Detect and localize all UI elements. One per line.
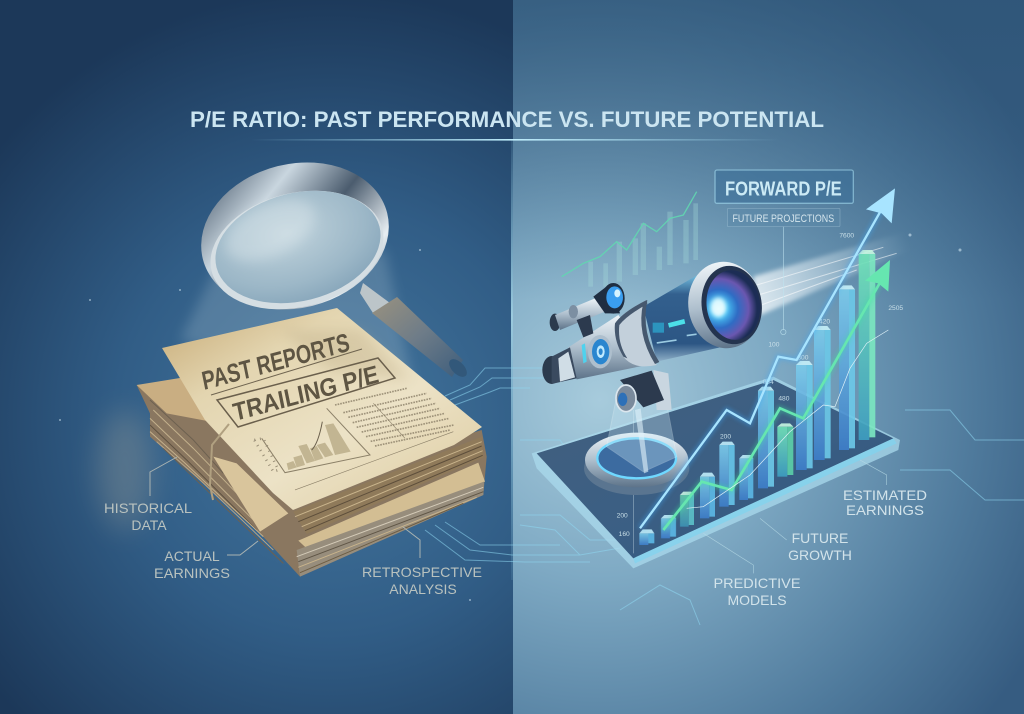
mount fork <box>616 370 672 412</box>
light cone <box>180 250 420 420</box>
bar value labels: 200 <box>617 512 628 519</box>
collar <box>615 300 657 366</box>
accent stripes <box>582 333 639 363</box>
label: actual earnings <box>154 541 258 581</box>
eyepiece <box>542 347 577 384</box>
label: estimated earnings: ESTIMATED <box>843 487 927 503</box>
background sparkles <box>59 234 962 601</box>
bar value labels: 004 <box>763 379 774 386</box>
rear body <box>568 315 655 379</box>
finder scope <box>550 283 625 337</box>
label: actual earnings: EARNINGS <box>154 565 230 581</box>
tablet platform <box>532 377 900 568</box>
left page edges <box>150 400 283 563</box>
green growth arrow <box>663 260 890 530</box>
label: actual earnings: ACTUAL <box>164 548 220 564</box>
label: retrospective analysis: ANALYSIS <box>389 581 457 597</box>
label: historical data: HISTORICAL <box>104 500 192 516</box>
telescope stand <box>584 387 689 495</box>
loose sheets left <box>137 377 220 423</box>
panel: past performance background <box>0 0 513 714</box>
label: historical data <box>104 457 192 533</box>
vertical pointer line <box>781 227 786 335</box>
tube readouts <box>653 319 697 344</box>
bar value labels: 7600 <box>839 232 854 239</box>
stack body <box>137 377 487 577</box>
title: P/E RATIO: PAST PERFORMANCE VS. FUTURE POTENTIAL <box>190 107 824 132</box>
group: forecast chart (zoom coordinates) <box>617 170 903 573</box>
label: future growth: GROWTH <box>788 547 852 563</box>
bar value labels <box>617 232 903 538</box>
light beam <box>753 232 910 317</box>
future projections badge <box>727 208 840 227</box>
lens rim <box>185 143 405 329</box>
label: predictive models <box>714 575 800 608</box>
panel: future potential background <box>513 0 1024 714</box>
group: magnifying glass over past reports <box>180 143 470 420</box>
dust cloud <box>97 410 153 530</box>
trailing p/e box: TRAILING P/E <box>231 360 381 427</box>
main tube <box>643 272 723 362</box>
bar value labels: 420 <box>819 318 830 325</box>
right layers <box>293 437 483 534</box>
future projections badge: FUTURE PROJECTIONS <box>732 213 834 225</box>
front ring <box>683 257 767 353</box>
label: predictive models: PREDICTIVE <box>714 575 800 591</box>
center divider <box>511 140 513 580</box>
lens glass <box>198 173 396 327</box>
telescope <box>542 257 767 412</box>
background mini line chart <box>562 192 698 287</box>
bar chart <box>639 250 875 545</box>
mini data table <box>335 388 454 446</box>
magnifier shadow on sheet <box>280 330 410 380</box>
handle <box>360 283 470 380</box>
top sheet <box>162 308 482 510</box>
circuit lines <box>425 368 1024 625</box>
callout leaders <box>703 460 887 573</box>
blue growth arrow <box>640 188 895 528</box>
report heading: past reports: PAST REPORTS <box>199 327 352 396</box>
forward p/e badge: FORWARD P/E <box>725 177 842 200</box>
mini bar chart <box>254 388 454 490</box>
label: estimated earnings: EARNINGS <box>846 502 924 518</box>
group: future chart base (zoom coordinates) <box>532 192 910 568</box>
bar value labels: 100 <box>768 342 780 349</box>
string <box>210 424 229 500</box>
lens highlight <box>216 186 324 274</box>
label: retrospective analysis <box>362 527 482 597</box>
label: future growth: FUTURE <box>792 530 848 546</box>
bar value labels: 200 <box>720 433 731 440</box>
title underline <box>250 139 780 141</box>
bar value labels: 160 <box>619 531 630 538</box>
dial <box>588 335 612 368</box>
rule <box>211 349 362 395</box>
bar value labels: 2505 <box>888 305 903 312</box>
group: paper stack <box>97 308 487 577</box>
front lens <box>696 262 767 348</box>
label: predictive models: MODELS <box>727 592 787 608</box>
label: future growth <box>788 530 852 563</box>
bar value labels: 480 <box>778 396 790 403</box>
label: historical data: DATA <box>131 517 167 533</box>
label: estimated earnings <box>843 487 927 518</box>
label: retrospective analysis: RETROSPECTIVE <box>362 564 482 580</box>
bar value labels: 300 <box>797 354 809 361</box>
forward p/e badge <box>715 170 853 203</box>
thin projection line <box>687 330 888 508</box>
